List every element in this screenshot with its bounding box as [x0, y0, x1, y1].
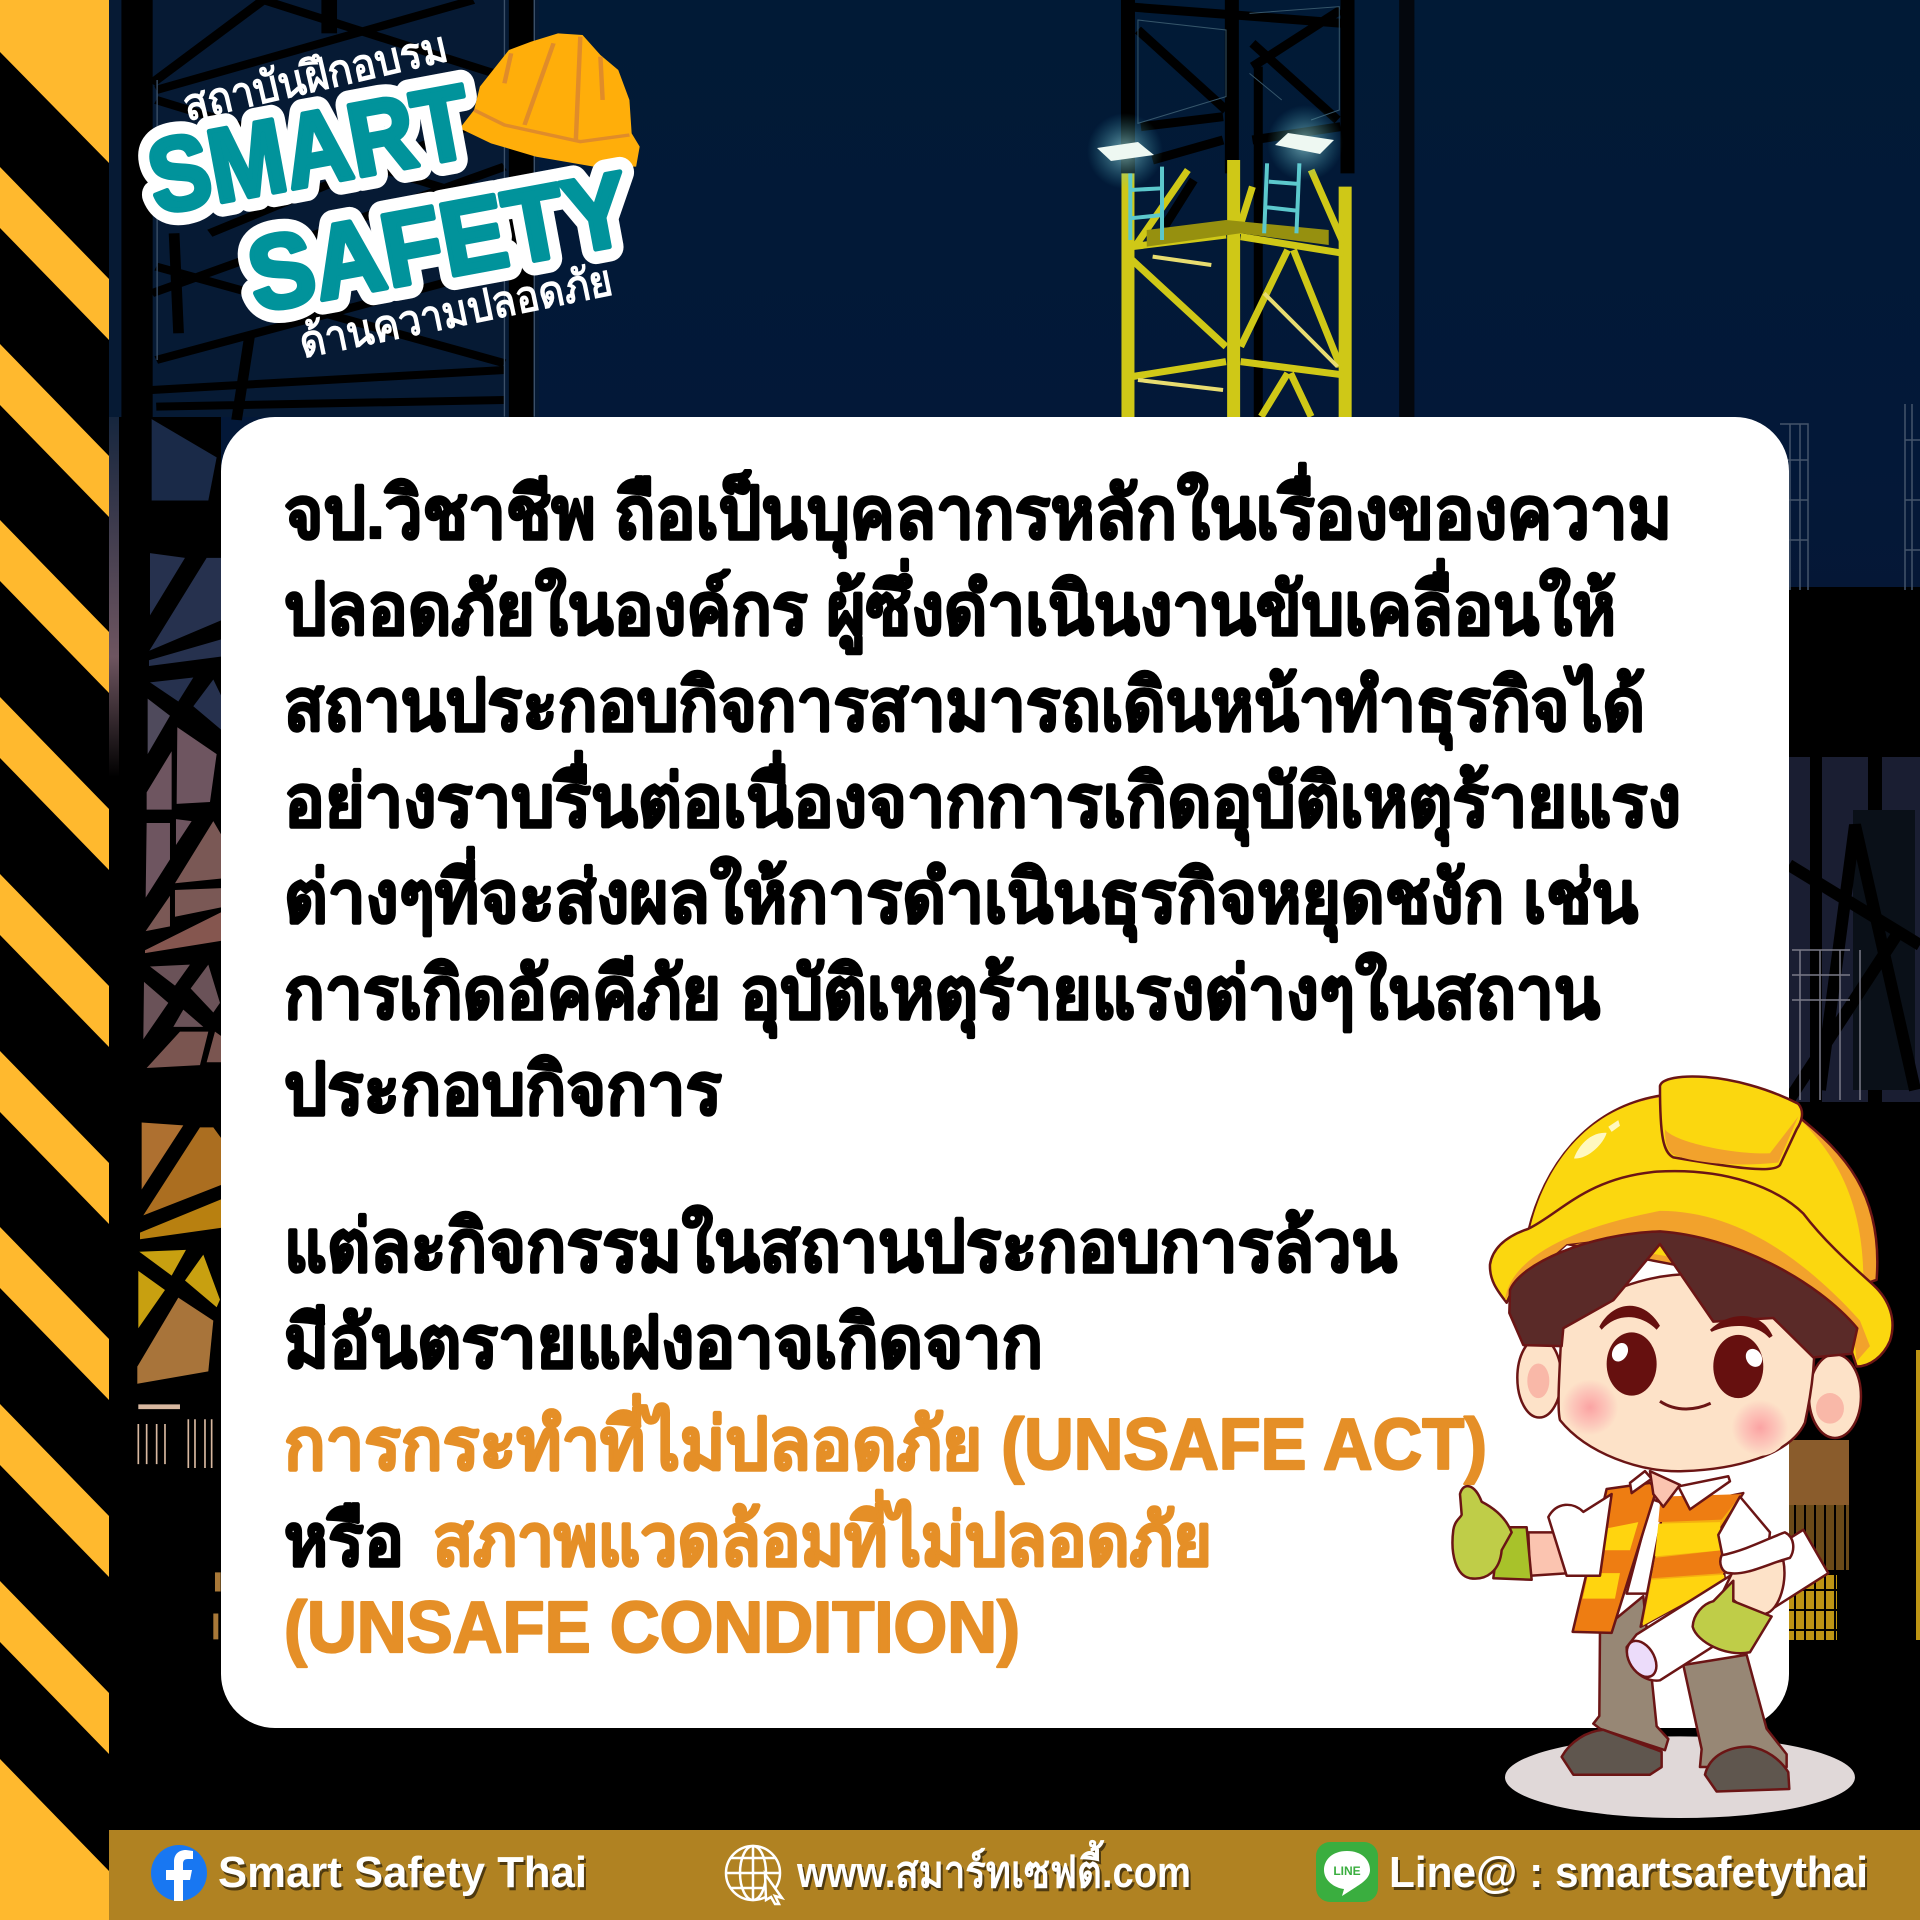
text block: intro paragraph: ต่างๆที่จะส่งผลให้การดำเนินธุรกิจหยุดชงัก เช่น — [284, 846, 1638, 943]
icon: orange hard hat — [460, 33, 640, 167]
background: left scaffold tower — [109, 0, 539, 420]
shirt and vest — [1548, 1471, 1770, 1633]
icon: facebook — [151, 1845, 207, 1901]
text block: intro paragraph: จป.วิชาชีพ ถือเป็นบุคลากรหลักในเรื่องของความ — [284, 462, 1672, 559]
text block: hazards paragraph: มีอันตรายแฝงอาจเกิดจาก — [284, 1303, 1043, 1383]
text block: intro paragraph: อย่างราบรื่นต่อเนื่องจากการเกิดอุบัติเหตุร้ายแรง — [284, 750, 1681, 847]
face — [1559, 1274, 1814, 1471]
text block: intro paragraph: ปลอดภัยในองค์กร ผู้ซึ่งดำเนินงานขับเคลื่อนให้ — [284, 558, 1616, 655]
ears — [1517, 1338, 1861, 1438]
text block: hazards paragraph: (UNSAFE CONDITION) — [284, 1588, 1020, 1668]
panel: white text card — [221, 417, 1789, 1728]
logo: Smart Safety: SAFETY — [239, 150, 639, 335]
logo: Smart Safety — [139, 22, 640, 368]
text block: hazards paragraph: แต่ละกิจกรรมในสถานประกอบการล้วน — [284, 1204, 1397, 1287]
blueprint roll and right hand — [1623, 1530, 1828, 1684]
text block: intro paragraph: สถานประกอบกิจการสามารถเดินหน้าทำธุรกิจได้ — [284, 663, 1645, 751]
text block: hazards paragraph: หรือ — [284, 1501, 404, 1581]
eyes, brows, cheeks, mouth — [1562, 1306, 1788, 1456]
hat dome and brim — [1490, 1076, 1893, 1367]
text block: intro paragraph — [284, 462, 1681, 1130]
background: left scaffold lower panels at dusk — [109, 417, 222, 1830]
hair — [1509, 1231, 1857, 1357]
social label: line: Line@ : smartsafetythai — [1389, 1848, 1868, 1897]
shadow ellipse — [1505, 1736, 1855, 1818]
text block: intro paragraph: การเกิดอัคคีภัย อุบัติเหตุร้ายแรงต่างๆในสถาน — [284, 951, 1600, 1039]
icon: flood lights — [1087, 105, 1343, 189]
text block: hazards paragraph: สภาพแวดล้อมที่ไม่ปลอดภัย — [433, 1489, 1212, 1581]
text block: hazards paragraph: การกระทำที่ไม่ปลอดภัย (UNSAFE ACT) — [284, 1393, 1487, 1485]
social label: facebook: Smart Safety Thai — [218, 1848, 587, 1897]
logo: Smart Safety: SMART — [139, 63, 480, 237]
logo: Smart Safety: SMART — [139, 63, 480, 237]
social label: website: www.สมาร์ทเซฟตี้.com — [796, 1839, 1191, 1897]
background: right side buildings — [1780, 404, 1920, 1830]
background: hazard stripe band — [0, 0, 109, 1920]
logo: Smart Safety: สถาบันฝึกอบรม — [178, 22, 452, 131]
logo: Smart Safety: ด้านความปลอดภัย — [295, 256, 617, 368]
icon: globe with cursor — [726, 1846, 782, 1904]
text block: hazards paragraph — [284, 1204, 1487, 1668]
text block: intro paragraph: ประกอบกิจการ — [284, 1050, 722, 1130]
footer bar — [109, 1830, 1920, 1920]
icon: LINE — [1316, 1842, 1378, 1902]
legs and shoes — [1562, 1596, 1789, 1792]
left arm and green glove — [1452, 1486, 1570, 1580]
illustration: cartoon safety worker — [1452, 1076, 1893, 1818]
icon: LINE: LINE — [1333, 1864, 1361, 1878]
background: ground under card — [109, 1650, 1920, 1830]
logo: Smart Safety: SAFETY — [239, 150, 639, 335]
background: central crane tower — [1087, 0, 1414, 420]
